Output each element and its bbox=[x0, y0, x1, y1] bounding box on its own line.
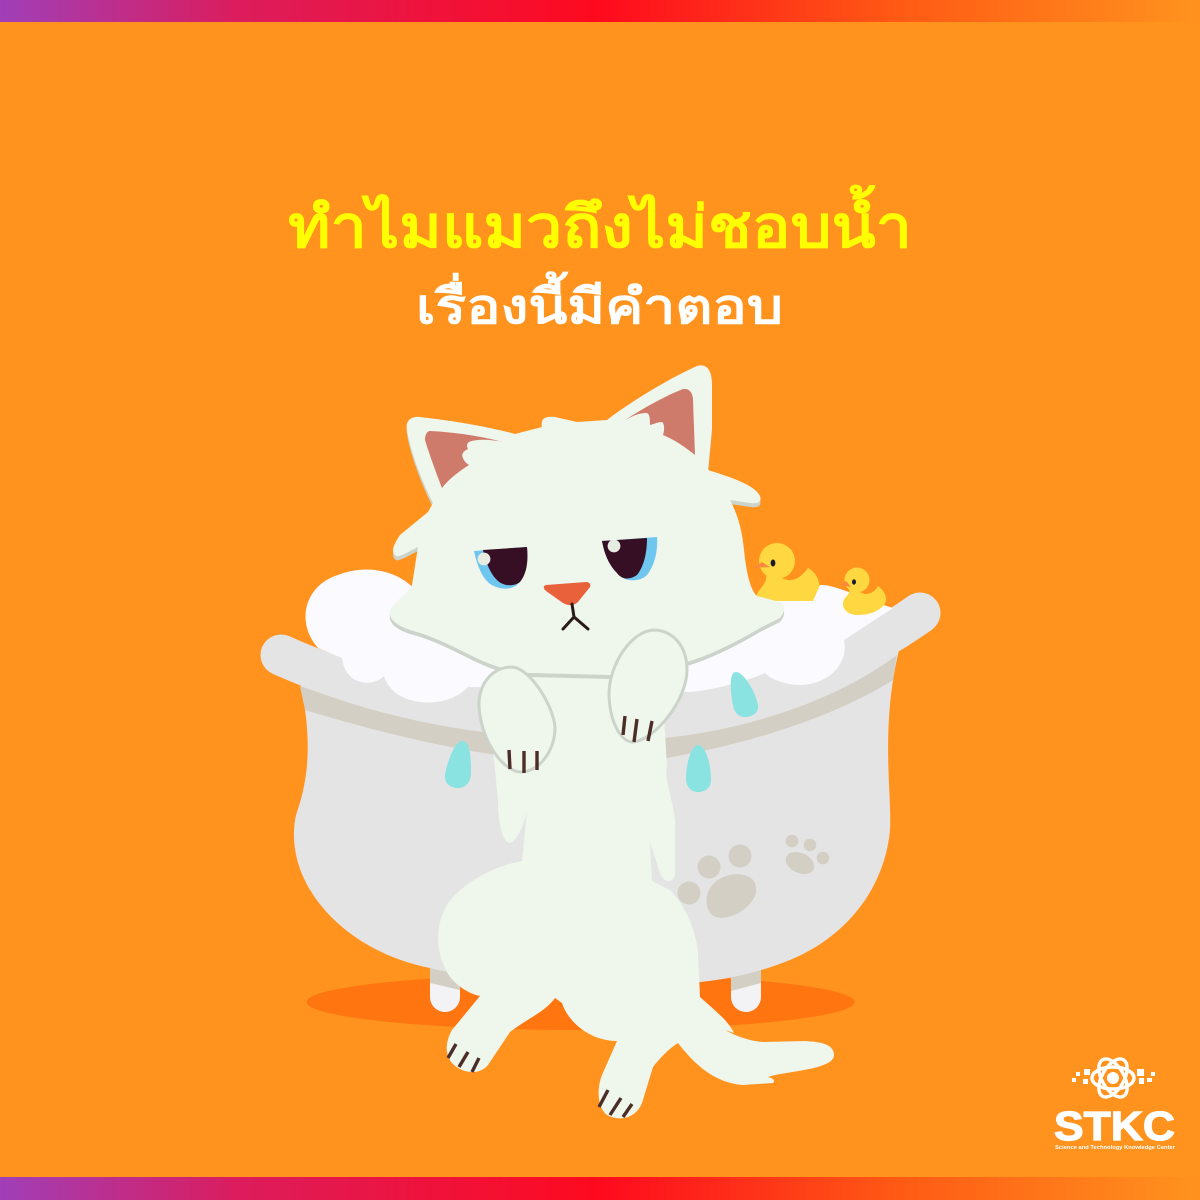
right inner ear bbox=[622, 389, 695, 455]
paw print small bbox=[782, 835, 829, 878]
cat head shadow bbox=[390, 369, 784, 679]
tub rim shadow band bbox=[300, 655, 897, 763]
claws bbox=[448, 716, 652, 1117]
cat illustration bbox=[390, 365, 834, 1118]
bottom gradient bar bbox=[0, 1177, 1200, 1200]
left inner ear bbox=[425, 431, 503, 488]
mouth bbox=[563, 604, 588, 629]
left front paw bbox=[479, 667, 555, 772]
top gradient bar bbox=[0, 0, 1200, 22]
tub feet bbox=[430, 950, 761, 1012]
left eye bbox=[474, 547, 527, 589]
nose bbox=[544, 582, 590, 605]
paw print large bbox=[678, 844, 756, 918]
duck on foam bbox=[840, 568, 886, 615]
subtitle: เรื่องนี้มีคำตอบ bbox=[416, 271, 783, 334]
floor shadow bbox=[306, 974, 854, 1030]
duck behind foam bbox=[753, 543, 819, 603]
logo emblem bbox=[1072, 1054, 1155, 1102]
title: ทำไมแมวถึงไม่ชอบน้ำ bbox=[288, 185, 912, 260]
soap foam bbox=[306, 570, 893, 702]
cat body, legs and tail bbox=[438, 650, 834, 1118]
bathtub illustration bbox=[281, 543, 920, 1012]
tub body bbox=[294, 650, 899, 988]
STKC logo bbox=[1054, 1054, 1176, 1151]
water drops bbox=[445, 672, 758, 792]
right eye bbox=[602, 537, 657, 580]
cat head bbox=[390, 365, 784, 675]
cat left arm bbox=[493, 740, 535, 843]
right front paw bbox=[609, 630, 687, 742]
logo tagline: Science and Technology Knowledge Center bbox=[1055, 1145, 1176, 1151]
logo wordmark: STKC bbox=[1054, 1103, 1175, 1149]
tub rim bbox=[281, 613, 920, 717]
